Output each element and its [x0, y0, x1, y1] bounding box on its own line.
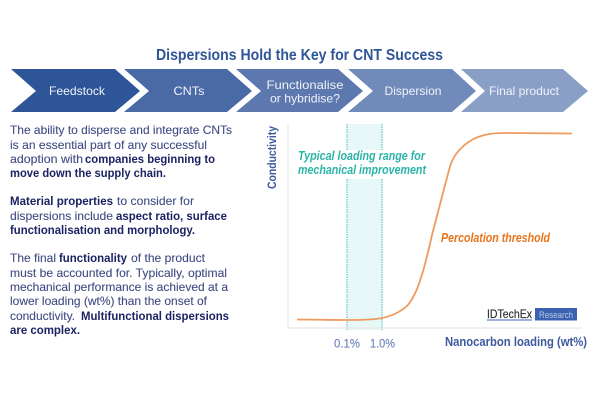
text block: functionality: are complex. — [10, 323, 80, 337]
curve label: Percolation threshold — [441, 231, 550, 245]
title: Dispersions Hold the Key for CNT Success — [156, 47, 443, 64]
chart: percolation curve — [265, 124, 587, 350]
band label: Typical loading range for — [298, 149, 426, 163]
text block: material properties: to consider for — [117, 194, 194, 208]
text block: adoption — [10, 123, 232, 180]
text block: material properties: Material properties — [10, 194, 113, 208]
text block: functionality: of the product — [131, 251, 206, 265]
chevron: Final product: Final product — [489, 84, 560, 98]
chevron: Dispersion — [348, 69, 476, 112]
text block: adoption: move down the supply chain. — [10, 166, 166, 180]
logo: IDTechEx Research: Research — [539, 310, 573, 321]
band label: mechanical improvement — [298, 163, 427, 177]
y axis title: Conductivity — [265, 126, 279, 189]
chevron: CNTs — [124, 69, 252, 112]
chevron: Dispersion: Dispersion — [384, 84, 442, 98]
text block: functionality: conductivity. — [10, 309, 75, 323]
chevron: Feedstock: Feedstock — [49, 84, 106, 98]
text block: material properties — [10, 194, 227, 237]
text block: adoption: The ability to disperse and integrate CNTs — [10, 123, 232, 137]
text block: adoption: companies beginning to — [85, 152, 215, 166]
band label — [296, 149, 429, 179]
text block: material properties: aspect ratio, surface — [116, 209, 227, 223]
text block: functionality: Multifunctional dispersions — [81, 309, 229, 323]
chevron: Functionalise or hybridise?: or hybridise? — [270, 92, 340, 106]
tick label 1.0%: 1.0% — [370, 336, 395, 350]
chevron: CNTs: CNTs — [174, 84, 204, 98]
chevron: Functionalise or hybridise? — [236, 69, 363, 112]
text block: functionality: functionality — [59, 251, 127, 265]
typical loading band — [347, 124, 382, 330]
text block: functionality: lower loading (wt%) than the onset of — [10, 294, 208, 308]
text block: adoption: is an essential part of any successful — [10, 138, 207, 152]
orange curve — [297, 133, 572, 320]
text block: adoption: adoption with — [10, 152, 83, 166]
chevron: Functionalise or hybridise?: Functionalise — [266, 78, 344, 92]
chevron: Feedstock — [11, 69, 140, 112]
tick label 0.1%: 0.1% — [334, 336, 360, 350]
logo: IDTechEx Research — [487, 307, 577, 321]
process chevrons — [11, 69, 588, 112]
x axis title: Nanocarbon loading (wt%) — [445, 335, 587, 349]
text block: material properties: functionalisation and morphology. — [10, 223, 195, 237]
text block: functionality: mechanical performance is achieved at a — [10, 280, 228, 294]
text block: functionality: must be accounted for. Typically, optimal — [10, 266, 227, 280]
logo: IDTechEx Research: IDTechEx — [487, 307, 532, 321]
chevron: Final product — [461, 69, 588, 112]
text block: functionality — [10, 251, 229, 337]
axes — [288, 124, 582, 328]
text block: material properties: dispersions include — [10, 209, 113, 223]
text block: functionality: The final — [10, 251, 56, 265]
